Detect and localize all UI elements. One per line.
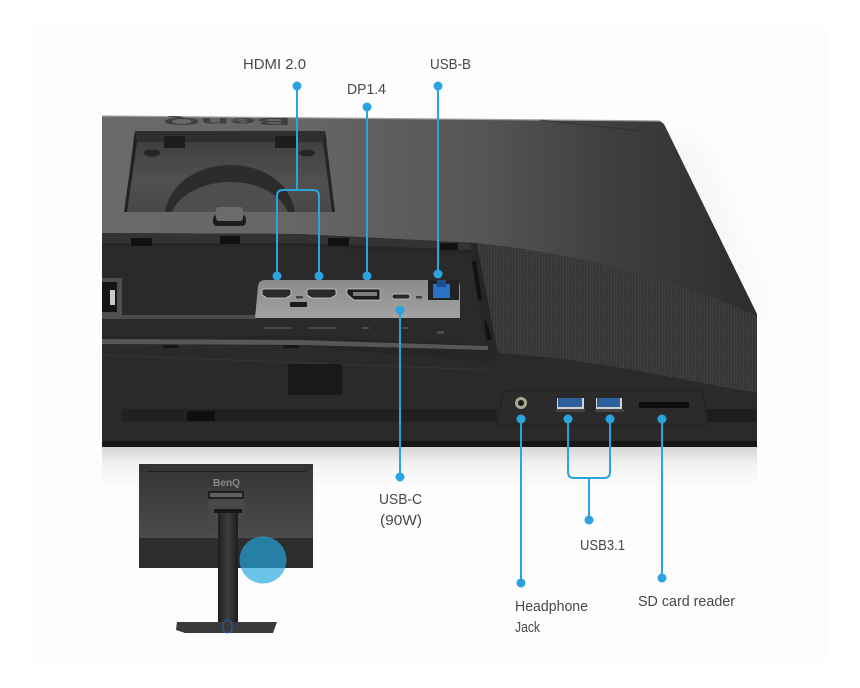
small monitor thumbnail xyxy=(139,464,313,633)
right vent xyxy=(707,409,757,422)
callout: USB-C: (90W) xyxy=(380,512,422,529)
callout: USB-B xyxy=(430,56,471,278)
USB 3.1 port xyxy=(595,398,624,412)
callout: USB-C xyxy=(379,306,422,529)
monitor upper back xyxy=(102,116,757,447)
headphone jack xyxy=(515,397,527,409)
callout: USB-B: USB-B xyxy=(430,56,471,73)
USB-C port xyxy=(392,294,410,299)
lower housing xyxy=(102,345,757,447)
callout: Headphone Jack: Jack xyxy=(515,619,540,636)
USB-B port xyxy=(428,280,459,300)
floor reflection xyxy=(102,446,757,488)
highlight circle xyxy=(240,536,286,584)
mesh vent band xyxy=(477,243,757,393)
HDMI port xyxy=(262,289,291,298)
callout: SD card reader: SD card reader xyxy=(638,593,735,610)
port labels under plate xyxy=(264,327,444,334)
thumbnail mount xyxy=(209,492,243,498)
thumbnail logo: BenQ xyxy=(213,478,240,489)
soft shadow xyxy=(664,130,770,335)
stand neck xyxy=(218,509,238,624)
label recess xyxy=(288,364,342,395)
mount circle xyxy=(165,165,295,212)
stand base xyxy=(176,622,277,633)
DisplayPort xyxy=(347,289,380,300)
screen back xyxy=(139,464,313,538)
USB 3.1 port xyxy=(556,398,585,412)
callout: USB3.1: USB3.1 xyxy=(580,537,625,554)
large monitor rear view xyxy=(102,116,770,447)
cable loop xyxy=(223,620,232,633)
callout: USB3.1 xyxy=(564,414,625,554)
embossed logo: BenQ xyxy=(163,116,291,126)
callout: DP1.4: DP1.4 xyxy=(347,81,386,98)
rear port plate xyxy=(255,280,460,318)
latch xyxy=(213,207,246,226)
left vent xyxy=(122,409,497,422)
SD card slot xyxy=(639,402,689,408)
left cable clip xyxy=(102,278,122,319)
callout: Headphone Jack: Headphone xyxy=(515,598,588,615)
callout: SD card reader xyxy=(638,414,735,610)
callout: Headphone Jack xyxy=(515,414,588,636)
side port bay xyxy=(497,391,707,425)
cable recess xyxy=(102,233,498,363)
callout: USB-C: USB-C xyxy=(379,491,422,508)
callout: HDMI 2.0: HDMI 2.0 xyxy=(243,56,306,73)
stand mount recess xyxy=(124,131,335,212)
callout: DP1.4 xyxy=(347,81,386,280)
HDMI port xyxy=(307,289,336,298)
callout: HDMI 2.0 xyxy=(243,56,324,280)
